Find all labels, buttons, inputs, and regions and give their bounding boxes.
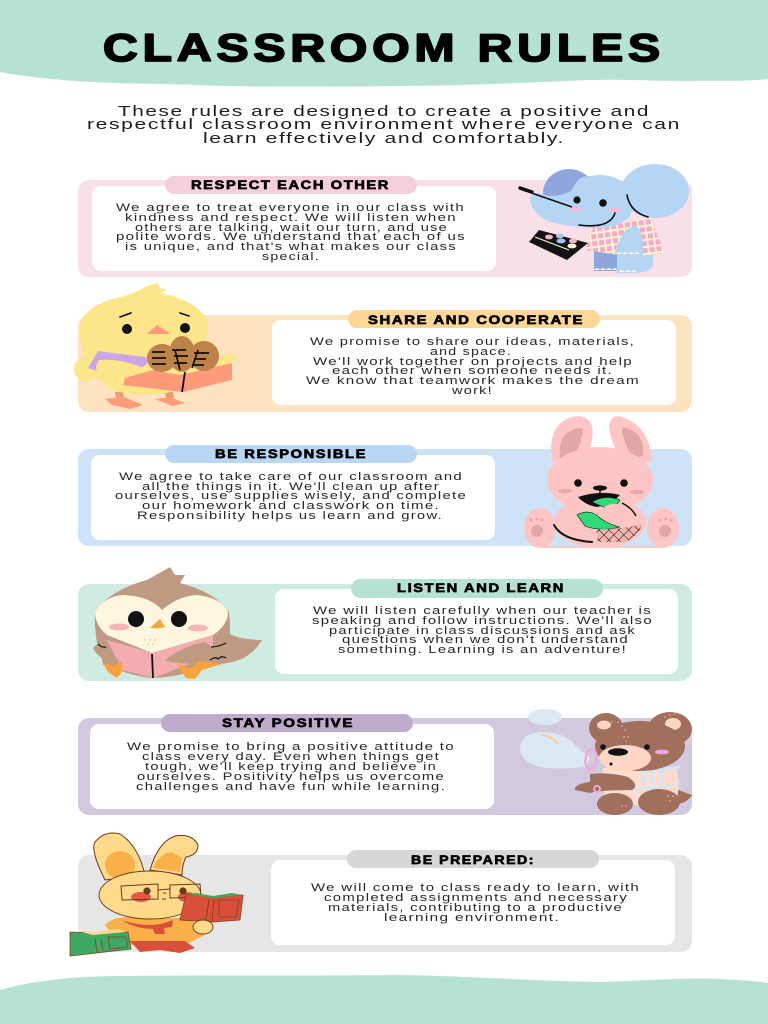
heading: listen and learn <box>351 579 603 598</box>
panel: be prepared <box>70 833 692 956</box>
body text: prepared: We will come to class ready to learn, with <box>311 882 640 894</box>
body text: responsible: We agree to take care of our classroom and <box>119 471 463 483</box>
body text: listen <box>312 605 653 656</box>
heading: share and cooperate: SHARE AND COOPERATE <box>368 313 584 327</box>
icon: elephant painter <box>520 164 689 273</box>
body text: positive: class every day. Even when things get <box>142 751 440 763</box>
body text: listen: something. Learning is an adventure! <box>338 644 627 656</box>
body text: share: each other when someone needs it. <box>332 365 613 377</box>
body text: share: work! <box>451 385 493 397</box>
intro text: These rules are designed to create a positive and <box>118 104 650 120</box>
body text: share: We promise to share our ideas, materials, <box>310 336 635 348</box>
intro text <box>87 104 681 147</box>
body text: prepared: completed assignments and necessary <box>324 892 628 904</box>
heading: respect each other: RESPECT EACH OTHER <box>191 178 390 192</box>
body text: positive <box>127 741 455 793</box>
body text: listen: speaking and follow instructions. We'll also <box>312 615 653 627</box>
heading: be prepared <box>347 850 599 868</box>
body text: responsible: ourselves, use supplies wisely, and complete <box>115 490 467 502</box>
icon: yellow bunny with books <box>70 833 243 956</box>
body text: respect: kindness and respect. We will listen when <box>125 212 457 224</box>
body text: positive: We promise to bring a positive attitude to <box>127 741 455 753</box>
icon: bear blowing bubbles <box>520 709 692 815</box>
intro text: learn effectively and comfortably. <box>203 131 565 147</box>
body text: share: We'll work together on projects and help <box>313 356 633 368</box>
panel: respect each other <box>78 164 692 277</box>
heading: respect each other <box>165 176 417 194</box>
body text: positive: tough, we'll keep trying and believe in <box>145 761 437 773</box>
heading: be responsible <box>165 445 417 463</box>
header wave <box>0 0 768 87</box>
body text: respect: polite words. We understand that each of us <box>116 231 466 243</box>
body text: responsible <box>115 471 467 522</box>
body text: share <box>306 336 640 397</box>
body text: share: We know that teamwork makes the dream <box>306 375 640 387</box>
title: CLASSROOM RULES <box>103 27 665 70</box>
heading: stay positive <box>161 714 413 732</box>
heading: be prepared: BE PREPARED: <box>411 853 535 867</box>
body text: share: and space. <box>430 346 512 358</box>
heading: listen and learn: LISTEN AND LEARN <box>397 581 565 595</box>
body text: responsible: our homework and classwork on time. <box>142 500 440 512</box>
heading: share and cooperate <box>348 310 600 328</box>
body text: prepared <box>311 882 640 924</box>
body text: listen: questions when we don't understand <box>342 634 629 646</box>
body text: respect: special. <box>262 251 320 263</box>
heading: stay positive: STAY POSITIVE <box>222 716 354 730</box>
body text: respect: others are talking, wait our turn, and use <box>135 222 448 234</box>
body text: listen: We will listen carefully when our teacher is <box>313 605 652 617</box>
body text: positive: challenges and have fun while learning. <box>136 781 446 793</box>
footer wave <box>0 975 768 1024</box>
body text: respect: is unique, and that's what makes our class <box>125 241 457 253</box>
body text: responsible: all the things in it. We'll clean up after <box>142 481 440 493</box>
body text: prepared: learning environment. <box>384 912 560 924</box>
panel: listen and learn <box>78 567 692 681</box>
panel: share and cooperate <box>74 283 692 412</box>
body text: listen: participate in class discussions and ask <box>329 625 636 637</box>
heading: be responsible: BE RESPONSIBLE <box>215 447 367 461</box>
icon: owl reading <box>93 567 262 679</box>
body text: positive: ourselves. Positivity helps us overcome <box>137 771 445 783</box>
panel: be responsible <box>78 416 692 548</box>
body text: responsible: Responsibility helps us learn and grow. <box>137 510 443 522</box>
icon: pink bunny with basket <box>524 416 679 548</box>
body text: respect <box>116 202 466 263</box>
body text: prepared: materials, contributing to a productive <box>328 902 623 914</box>
body text: respect: We agree to treat everyone in our class with <box>116 202 465 214</box>
intro text: respectful classroom environment where everyone can <box>87 117 681 133</box>
icon: chick with nuts <box>74 283 237 409</box>
panel: stay positive <box>78 709 692 815</box>
